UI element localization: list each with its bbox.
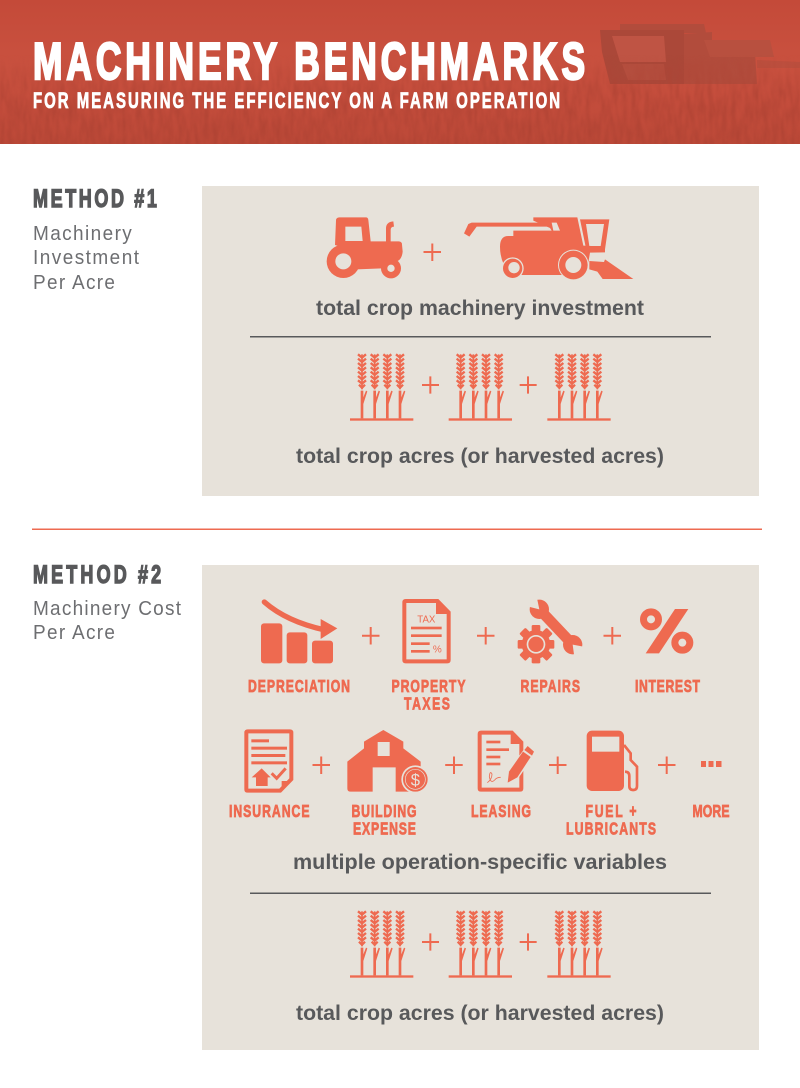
plus [477, 627, 494, 644]
method 1 description [33, 223, 140, 294]
label: property taxes: TAXES [404, 694, 450, 714]
icon: barn with dollar coin: $ [411, 770, 420, 789]
icon: tractor [327, 217, 403, 278]
panel: method 1 [202, 186, 759, 496]
section divider [32, 528, 762, 530]
plus [312, 756, 330, 774]
icon: insurance document [244, 729, 293, 793]
icon: depreciation [261, 602, 337, 663]
label: fuel + lubricants: FUEL + [586, 802, 637, 822]
icon: property tax document: TAX [417, 615, 436, 626]
method 2 description: Machinery Cost [33, 598, 182, 620]
title: MACHINERY BENCHMARKS [33, 33, 585, 91]
label: building expense: EXPENSE [353, 819, 416, 839]
numerator label: multiple operation-specific variables [293, 851, 667, 874]
method 2 heading: METHOD #2 [33, 560, 161, 589]
method 1 description: Machinery [33, 223, 132, 245]
icon: percent [643, 609, 690, 653]
label: fuel + lubricants [566, 802, 656, 839]
icon: barn with dollar coin [347, 730, 429, 793]
label: interest: INTEREST [635, 677, 700, 697]
icon: fuel pump [587, 731, 637, 791]
icon: combine harvester [464, 217, 633, 280]
icon: leasing contract [478, 731, 535, 792]
method 2 description: Per Acre [33, 622, 115, 644]
icon: property tax document: % [433, 645, 442, 656]
plus [362, 627, 380, 644]
label: repairs: REPAIRS [520, 677, 580, 697]
panel: method 2 [202, 565, 759, 1050]
fraction line [250, 336, 711, 338]
label: property taxes [392, 677, 465, 714]
label: depreciation: DEPRECIATION [248, 677, 350, 697]
denominator label: total crop acres (or harvested acres) [296, 1002, 664, 1025]
photo: harvester in field [600, 24, 800, 84]
label: fuel + lubricants: LUBRICANTS [566, 819, 656, 839]
method 1 description: Investment [33, 247, 140, 269]
plus [445, 756, 463, 774]
subtitle: FOR MEASURING THE EFFICIENCY ON A FARM OPERATION [33, 88, 560, 113]
icon: wheat row [350, 911, 611, 978]
label: building expense: BUILDING [352, 802, 417, 822]
icon: property tax document [402, 599, 451, 663]
header banner [0, 0, 800, 144]
label: insurance: INSURANCE [229, 802, 310, 822]
fraction line [250, 892, 711, 894]
label: more: MORE [692, 802, 729, 822]
method 1 heading: METHOD #1 [33, 184, 157, 213]
photo: field texture [0, 71, 800, 144]
icon: more dots [701, 761, 722, 767]
method 1 description: Per Acre [33, 272, 115, 294]
label: building expense [352, 802, 417, 839]
plus [658, 756, 676, 774]
method 2 description [33, 598, 182, 644]
label: leasing: LEASING [471, 802, 531, 822]
numerator label: total crop machinery investment [316, 297, 644, 320]
label: property taxes: PROPERTY [392, 677, 465, 697]
icon: wheat row [350, 354, 611, 421]
plus [604, 627, 621, 644]
plus [424, 244, 441, 261]
plus [549, 756, 566, 774]
icon: repairs wrench and gear [518, 593, 587, 663]
denominator label: total crop acres (or harvested acres) [296, 445, 664, 468]
